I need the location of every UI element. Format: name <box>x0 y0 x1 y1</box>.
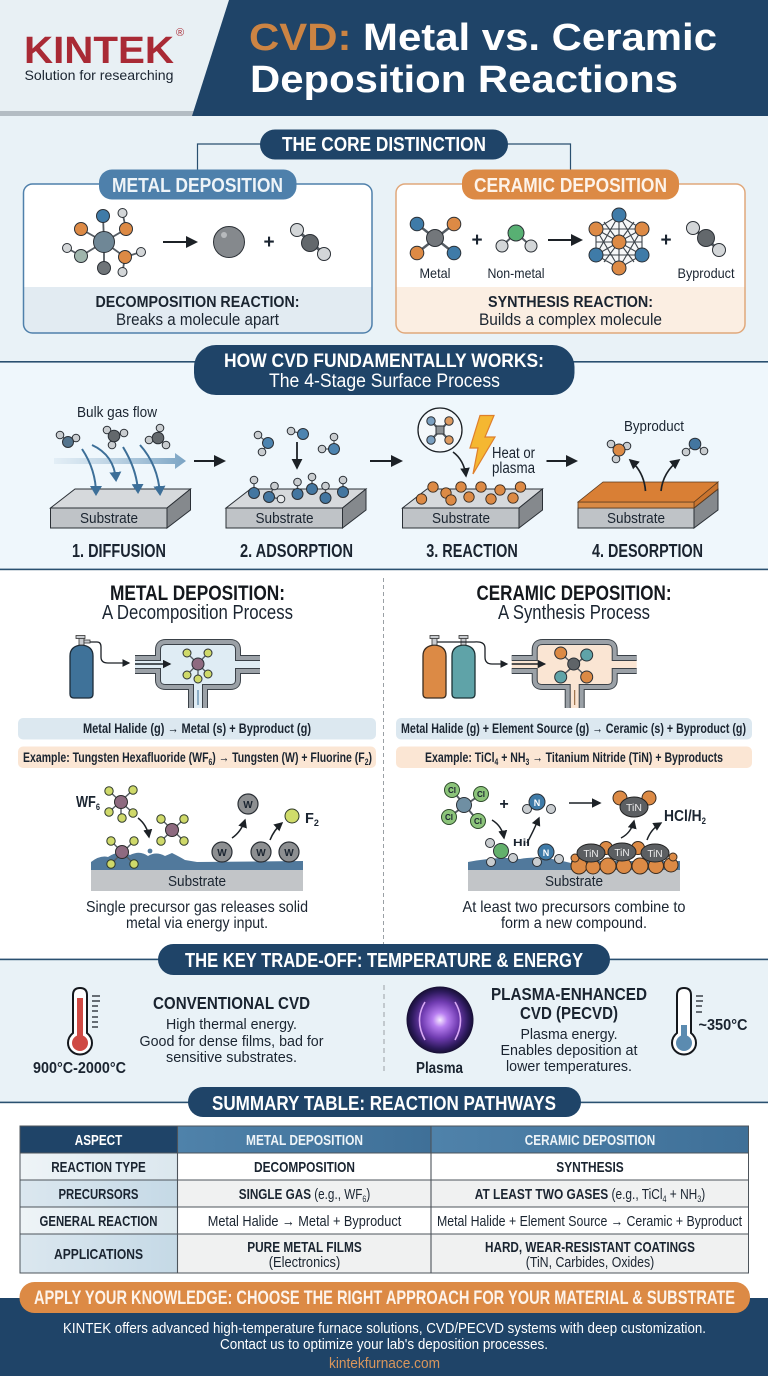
panel: ceramic deposition <box>396 170 745 333</box>
summary table <box>20 1126 748 1273</box>
header row: ASPECT <box>75 1133 122 1149</box>
desorption arrows <box>630 460 679 491</box>
call to action banner <box>20 1282 750 1313</box>
example bar <box>396 746 752 768</box>
label: bulk gas flow: Bulk gas flow <box>77 404 157 421</box>
substrate block: Substrate <box>256 510 314 527</box>
NH3 molecule <box>522 794 556 814</box>
stage 4: desorption <box>578 418 718 561</box>
text block: sensitive substrates. <box>166 1049 297 1066</box>
tungsten atoms: W <box>284 848 294 859</box>
icon: byproduct molecule: Byproduct <box>678 265 735 281</box>
arrow: stage 1 to 2 <box>194 460 224 462</box>
example bar: Example: Tungsten Hexafluoride (WF <box>23 749 270 765</box>
tungsten atoms: W <box>256 848 266 859</box>
text block: PLASMA-ENHANCED <box>491 984 647 1004</box>
example bar: 3 <box>526 757 529 767</box>
footer <box>0 1282 768 1376</box>
example bar: ) <box>368 749 372 765</box>
TiN film <box>571 842 678 874</box>
heading <box>476 582 672 624</box>
heading: A Decomposition Process <box>102 602 293 624</box>
formula bar <box>18 718 376 740</box>
heading: summary table <box>188 1087 581 1117</box>
magnified molecule <box>418 408 462 452</box>
heading: the core distinction <box>260 130 508 160</box>
row: precursors: 3 <box>697 1194 701 1204</box>
adsorbed molecules <box>248 473 348 504</box>
caption: At least two precursors combine to <box>462 899 686 916</box>
row: reaction type: DECOMPOSITION <box>254 1159 355 1176</box>
icon: non-metal molecule <box>488 225 544 281</box>
substrate <box>91 849 303 891</box>
arrow: reaction <box>163 241 196 243</box>
arrow: synthesis <box>548 239 581 241</box>
label: HCl/H2: HCl/H <box>664 808 708 825</box>
substrate block: Substrate <box>80 510 138 527</box>
badge: metal deposition: METAL DEPOSITION <box>112 175 283 197</box>
gas molecules <box>254 427 340 456</box>
heading: summary table: SUMMARY TABLE: REACTION PATHWAYS <box>212 1093 556 1115</box>
row: precursors: 6 <box>362 1194 366 1204</box>
title: Deposition Reactions <box>250 59 678 101</box>
logo: ® <box>176 27 184 39</box>
substrate block <box>50 489 190 528</box>
row: applications <box>54 1239 695 1271</box>
panel: metal deposition process <box>18 582 376 932</box>
text block: CONVENTIONAL CVD <box>153 993 310 1013</box>
icon: plasma orb <box>406 986 474 1054</box>
label: 3. reaction: 3. REACTION <box>426 541 518 561</box>
substrate block with film: Substrate <box>607 510 665 527</box>
example bar: Example: TiCl <box>425 749 517 765</box>
caption: Single precursor gas releases solid <box>86 899 308 916</box>
heading: the key trade-off: THE KEY TRADE-OFF: TEMPERATURE & ENERGY <box>185 950 584 972</box>
TiCl4 molecule <box>442 782 488 828</box>
icon: cool thermometer <box>672 988 703 1054</box>
TiN film: TiN <box>583 849 599 860</box>
heading: METAL DEPOSITION: <box>110 582 285 605</box>
heading: A Synthesis Process <box>498 602 650 624</box>
logo: KINTEK <box>24 30 175 72</box>
TiN film: TiN <box>647 849 663 860</box>
stage 1: diffusion <box>50 404 190 561</box>
label: heat or plasma: Heat or <box>492 445 535 462</box>
adsorbed precursors: N <box>543 848 549 858</box>
text: synthesis reaction: SYNTHESIS REACTION: <box>488 294 653 311</box>
text block: High thermal energy. <box>166 1016 297 1033</box>
example bar: 2 <box>365 757 368 767</box>
text: decomposition reaction: Breaks a molecule apart <box>116 311 279 329</box>
TiCl4 molecule: Cl <box>477 790 485 799</box>
diagram: WF6 decomposition on substrate <box>76 786 319 891</box>
TiN film: TiN <box>614 848 630 859</box>
label: plasma: Plasma <box>416 1060 463 1077</box>
caption <box>462 899 686 932</box>
footer text <box>63 1320 706 1353</box>
icon: non-metal molecule: Non-metal <box>488 265 544 281</box>
example bar: ) → Tungsten (W) + Fluorine (F <box>212 749 365 765</box>
TiN product: TiN <box>626 802 642 814</box>
table backgrounds <box>20 1126 748 1273</box>
example bar: 6 <box>208 757 212 767</box>
fluorine atom and label: 2 <box>314 818 319 828</box>
row: precursors: ) <box>366 1186 370 1203</box>
tungsten atoms <box>212 794 299 862</box>
adsorbed precursors: HiI <box>513 838 530 849</box>
label: heat or plasma <box>492 445 535 477</box>
label: WF6: WF <box>76 794 100 811</box>
panel: conventional CVD <box>33 988 324 1077</box>
adsorbed precursors <box>486 838 564 866</box>
icon: metal molecule <box>410 217 461 281</box>
row: applications: APPLICATIONS <box>54 1246 143 1263</box>
heading: how CVD fundamentally works: HOW CVD FUNDAMENTALLY WORKS: <box>224 351 544 372</box>
row: general reaction <box>40 1213 743 1230</box>
stage 3: reaction <box>402 408 542 561</box>
panel: plasma-enhanced CVD <box>406 984 748 1077</box>
text block <box>140 993 324 1066</box>
panel: metal deposition <box>24 170 372 333</box>
text: decomposition reaction <box>96 294 300 329</box>
tungsten atoms: W <box>217 848 227 859</box>
stage 2: adsorption <box>226 427 366 561</box>
text block: Plasma energy. <box>520 1026 618 1043</box>
fluorine atom and label: F <box>305 811 314 827</box>
heading: the key trade-off <box>158 944 610 975</box>
row: precursors: SINGLE GAS (e.g., WF <box>239 1186 377 1203</box>
icon: hot thermometer <box>68 988 100 1054</box>
row: general reaction: Metal Halide → Metal + Byproduct <box>208 1213 402 1230</box>
connector lines: core distinction <box>198 144 570 172</box>
label: 4. desorption: 4. DESORPTION <box>592 541 703 561</box>
row: reaction type: SYNTHESIS <box>556 1159 624 1176</box>
badge: ceramic deposition <box>462 170 679 200</box>
text block: lower temperatures. <box>506 1058 632 1075</box>
header row: CERAMIC DEPOSITION <box>525 1133 655 1149</box>
header row: METAL DEPOSITION <box>246 1133 363 1149</box>
header row <box>75 1133 655 1149</box>
icon: byproduct molecule <box>290 224 330 260</box>
icon: reaction chamber <box>135 642 260 708</box>
label: temperature range: 900°C-2000°C <box>33 1060 126 1077</box>
text block <box>491 984 647 1075</box>
icon: metal molecule: Metal <box>420 265 450 281</box>
title <box>249 17 717 101</box>
row: applications: HARD, WEAR-RESISTANT COATINGS <box>485 1239 695 1256</box>
orange surface atoms <box>416 482 526 505</box>
substrate: Substrate <box>168 873 226 890</box>
label: heat or plasma: plasma <box>492 460 535 477</box>
text block: Enables deposition at <box>500 1042 638 1059</box>
substrate <box>468 858 680 891</box>
icon: metal atom <box>214 226 244 258</box>
badge: ceramic deposition: CERAMIC DEPOSITION <box>474 175 667 197</box>
row: general reaction: GENERAL REACTION <box>40 1213 158 1230</box>
text: synthesis reaction <box>479 294 662 329</box>
icon: lightning bolt <box>470 416 495 474</box>
arrow: reaction <box>569 802 600 804</box>
arrow: gas feed <box>437 642 507 664</box>
row: applications: PURE METAL FILMS <box>247 1239 362 1256</box>
heading: how CVD fundamentally works <box>194 345 574 395</box>
TiCl4 molecule: Cl <box>445 813 453 822</box>
plus sign: + <box>660 230 672 251</box>
NH3 molecule: N <box>534 798 540 808</box>
label: HCl/H2: 2 <box>702 816 706 826</box>
title: CVD: Metal vs. Ceramic <box>249 17 717 59</box>
text: decomposition reaction: DECOMPOSITION REACTION: <box>96 294 300 311</box>
panel: ceramic deposition process <box>396 582 752 932</box>
heading: CERAMIC DEPOSITION: <box>476 582 672 605</box>
text: synthesis reaction: Builds a complex molecule <box>479 311 662 329</box>
example bar: + NH <box>498 749 526 765</box>
logo: Solution for researching <box>24 67 174 83</box>
footer text: KINTEK offers advanced high-temperature furnace solutions, CVD/PECVD systems with deep customization. <box>63 1320 706 1337</box>
arrows: products leaving <box>232 820 282 840</box>
diagram: TiN synthesis on substrate <box>442 782 706 891</box>
arrow: stage 3 to 4 <box>546 460 576 462</box>
icon: byproduct molecule <box>678 222 735 281</box>
TiCl4 molecule: Cl <box>474 817 482 826</box>
arrow: gas feed <box>90 642 129 663</box>
plus sign: + <box>263 232 275 253</box>
row: precursors <box>58 1186 705 1204</box>
icon: two gas cylinders <box>423 636 475 698</box>
caption <box>86 899 308 932</box>
WF6 molecules <box>105 786 188 868</box>
formula bar: Metal Halide (g) → Metal (s) + Byproduct (g) <box>83 720 311 736</box>
row: reaction type: REACTION TYPE <box>51 1159 146 1176</box>
logo <box>24 27 184 83</box>
arrow: stage 2 to 3 <box>370 460 401 462</box>
icon: complex ceramic molecule <box>589 208 649 275</box>
adsorption arrow <box>296 442 298 468</box>
row: precursors: + NH <box>667 1186 697 1203</box>
substrate block <box>402 489 542 528</box>
gas flow arrow <box>54 453 186 469</box>
label: temperature: ~350°C <box>698 1017 748 1034</box>
byproduct molecules <box>607 438 708 463</box>
gas molecules <box>56 424 170 449</box>
TiCl4 molecule: Cl <box>448 786 456 795</box>
label: 1. diffusion: 1. DIFFUSION <box>72 541 166 561</box>
icon: metal precursor molecule <box>62 208 146 276</box>
caption: form a new compound. <box>501 915 647 932</box>
heading: the core distinction: THE CORE DISTINCTION <box>282 134 486 156</box>
substrate: Substrate <box>545 873 603 890</box>
plus sign: + <box>499 796 509 813</box>
row: applications: (TiN, Carbides, Oxides) <box>526 1254 654 1271</box>
example bar: 4 <box>494 757 498 767</box>
tungsten atoms: W <box>243 800 253 811</box>
text block: CVD (PECVD) <box>520 1003 618 1023</box>
TiN product <box>613 791 656 817</box>
row: precursors: 4 <box>663 1194 667 1204</box>
example bar <box>18 746 376 768</box>
row: applications: (Electronics) <box>269 1254 340 1271</box>
arrows <box>492 818 661 843</box>
text block: Good for dense films, bad for <box>140 1033 324 1050</box>
divider <box>383 985 385 1075</box>
footer text: Contact us to optimize your lab's deposition processes. <box>220 1336 548 1353</box>
arrow: molecule to surface <box>138 818 149 837</box>
row: precursors: PRECURSORS <box>58 1186 138 1203</box>
icon: reaction chamber <box>512 642 637 708</box>
caption: metal via energy input. <box>126 915 268 932</box>
row: precursors: ) <box>701 1186 705 1203</box>
divider: metal vs ceramic columns <box>382 578 384 944</box>
label: 2. adsorption: 2. ADSORPTION <box>240 541 353 561</box>
row: reaction type <box>51 1159 624 1176</box>
header <box>0 0 768 116</box>
heading: how CVD fundamentally works: The 4-Stage Surface Process <box>269 371 500 392</box>
diffusion arrows <box>82 445 160 494</box>
substrate block with film <box>578 482 718 528</box>
website: kintekfurnace.com <box>329 1355 440 1372</box>
badge: metal deposition <box>99 170 296 200</box>
row: precursors: AT LEAST TWO GASES (e.g., TiCl <box>475 1186 677 1203</box>
heading <box>102 582 293 624</box>
label: WF6: 6 <box>96 802 100 812</box>
plus sign: + <box>471 230 483 251</box>
arrow: molecule to surface <box>453 452 466 476</box>
substrate block: Substrate <box>432 510 490 527</box>
icon: gas cylinder <box>70 636 93 698</box>
fluorine atom and label <box>285 809 319 828</box>
label: byproduct: Byproduct <box>624 418 685 435</box>
